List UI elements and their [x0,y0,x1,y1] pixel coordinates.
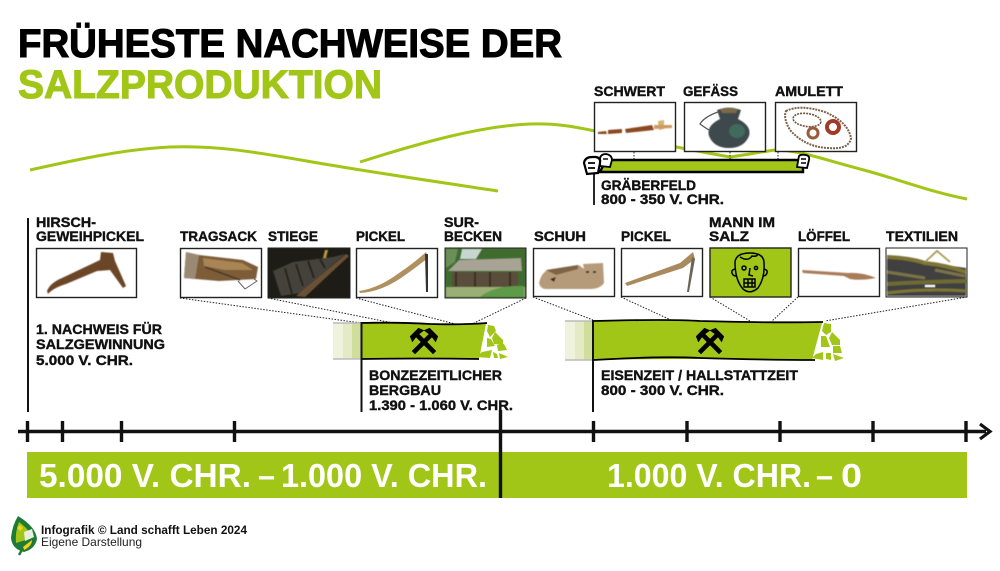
panel: Hirschgeweihpickel [28,214,165,412]
icon: salt man face [732,253,767,292]
label [369,367,513,413]
artefact: Stiege: STIEGE [268,228,318,244]
label: BERGBAU [369,382,441,398]
band: Bronzezeit mining [362,323,486,359]
connector lines: Bronzezeit [180,298,526,324]
period: 1.000 to 0: – [816,457,833,494]
timeline axis [18,421,990,442]
marker line [27,218,29,412]
icon: rocks [812,323,844,361]
artefact: Pickel: PICKEL [356,228,405,244]
artefact: Stiege [268,228,350,298]
period: 5.000 to 1.000 [27,452,499,498]
artefact: Gefäss: GEFÄSS [683,83,738,99]
artefact: Textilien [886,228,967,297]
artefact: Schuh: SCHUH [534,228,586,244]
period: 1.000 to 0: 0 [841,457,862,494]
icon: gravestone left front [584,157,600,174]
artefact: Mann im Salz [709,214,791,297]
credit text: Eigene Darstellung [41,535,142,549]
artefact: Schwert: SCHWERT [594,83,665,99]
hill landscape lines [30,124,967,199]
period: 5.000 to 1.000: 1.000 V. CHR. [281,457,487,494]
note: first evidence: SALZGEWINNUNG [36,336,165,352]
grave field label: GRÄBERFELD [601,177,696,193]
label: 800 - 300 V. CHR. [601,382,724,398]
note: first evidence: 5.000 V. CHR. [36,352,133,368]
title: SALZPRODUKTION [18,63,382,107]
artefact: Pickel [621,228,702,296]
artefact: Schuh [534,228,614,296]
grave field band [600,160,803,172]
title: FRÜHESTE NACHWEISE DER [18,21,562,66]
icon: crossed hammers [693,326,727,359]
period: 5.000 to 1.000: 5.000 V. CHR. [39,457,251,494]
label: BONZEZEITLICHER [369,367,502,383]
label: HIRSCH- [36,214,96,230]
label: 1.390 - 1.060 V. CHR. [369,397,513,413]
marker line [592,320,594,412]
artefact: Surbecken: BECKEN [444,228,502,244]
artefact: Tragsack: TRAGSACK [180,228,257,244]
band: Eisenzeit mining [594,321,822,360]
title [18,21,562,107]
label [36,214,144,244]
footer [11,516,247,555]
icon: crossed hammers [407,326,441,359]
grave field label: 800 - 350 V. CHR. [601,191,724,207]
artefact: Schwert [594,83,676,152]
panel: Bronzezeit [180,214,526,413]
label: GEWEIHPICKEL [36,228,144,244]
artefact: Textilien: TEXTILIEN [886,228,958,244]
artefact: Amulett [775,83,856,152]
period: 1.000 to 0 [502,452,967,498]
icon: leaf logo [11,516,37,555]
grave field label [601,177,724,207]
label: EISENZEIT / HALLSTATTZEIT [601,367,798,383]
label [601,367,798,398]
note: first evidence [36,321,165,368]
connector lines: Eisenzeit [533,297,967,322]
credit text [41,523,247,549]
center divider [499,410,502,498]
grave field marker line [593,170,595,205]
artefact: Löffel: LÖFFEL [798,228,850,244]
artefact: Löffel [798,228,880,296]
artefact: Gefäss [683,83,766,152]
marker line [360,322,362,412]
credit text: Infografik © Land schafft Leben 2024 [41,523,247,537]
band: Bronzezeit fade [333,323,362,359]
artefact: Pickel [356,228,438,298]
band outline [594,320,823,360]
panel: grave field top artefacts [584,83,856,207]
artefact: Pickel: PICKEL [621,228,671,244]
icon: gravestone right [797,155,809,168]
icon: gravestone left back [600,154,612,167]
band: Eisenzeit fade [565,321,594,360]
period: 1.000 to 0: 1.000 V. CHR. [607,457,811,494]
artefact: Amulett: AMULETT [775,83,843,99]
panel: Eisenzeit [533,214,967,412]
period: 5.000 to 1.000: – [258,457,275,494]
connector lines: grave field [634,152,778,171]
artefact: Surbecken: SUR- [444,214,479,230]
band outline [361,323,487,359]
artefact: Mann im Salz: SALZ [709,228,749,244]
artefact: Mann im Salz: MANN IM [709,214,775,230]
period bar [27,410,967,498]
artefact: Tragsack [180,228,262,298]
artefact: Surbecken [444,214,526,298]
icon: rocks [476,325,508,359]
note: first evidence: 1. NACHWEIS FÜR [36,321,162,337]
photo: antler [36,248,136,298]
